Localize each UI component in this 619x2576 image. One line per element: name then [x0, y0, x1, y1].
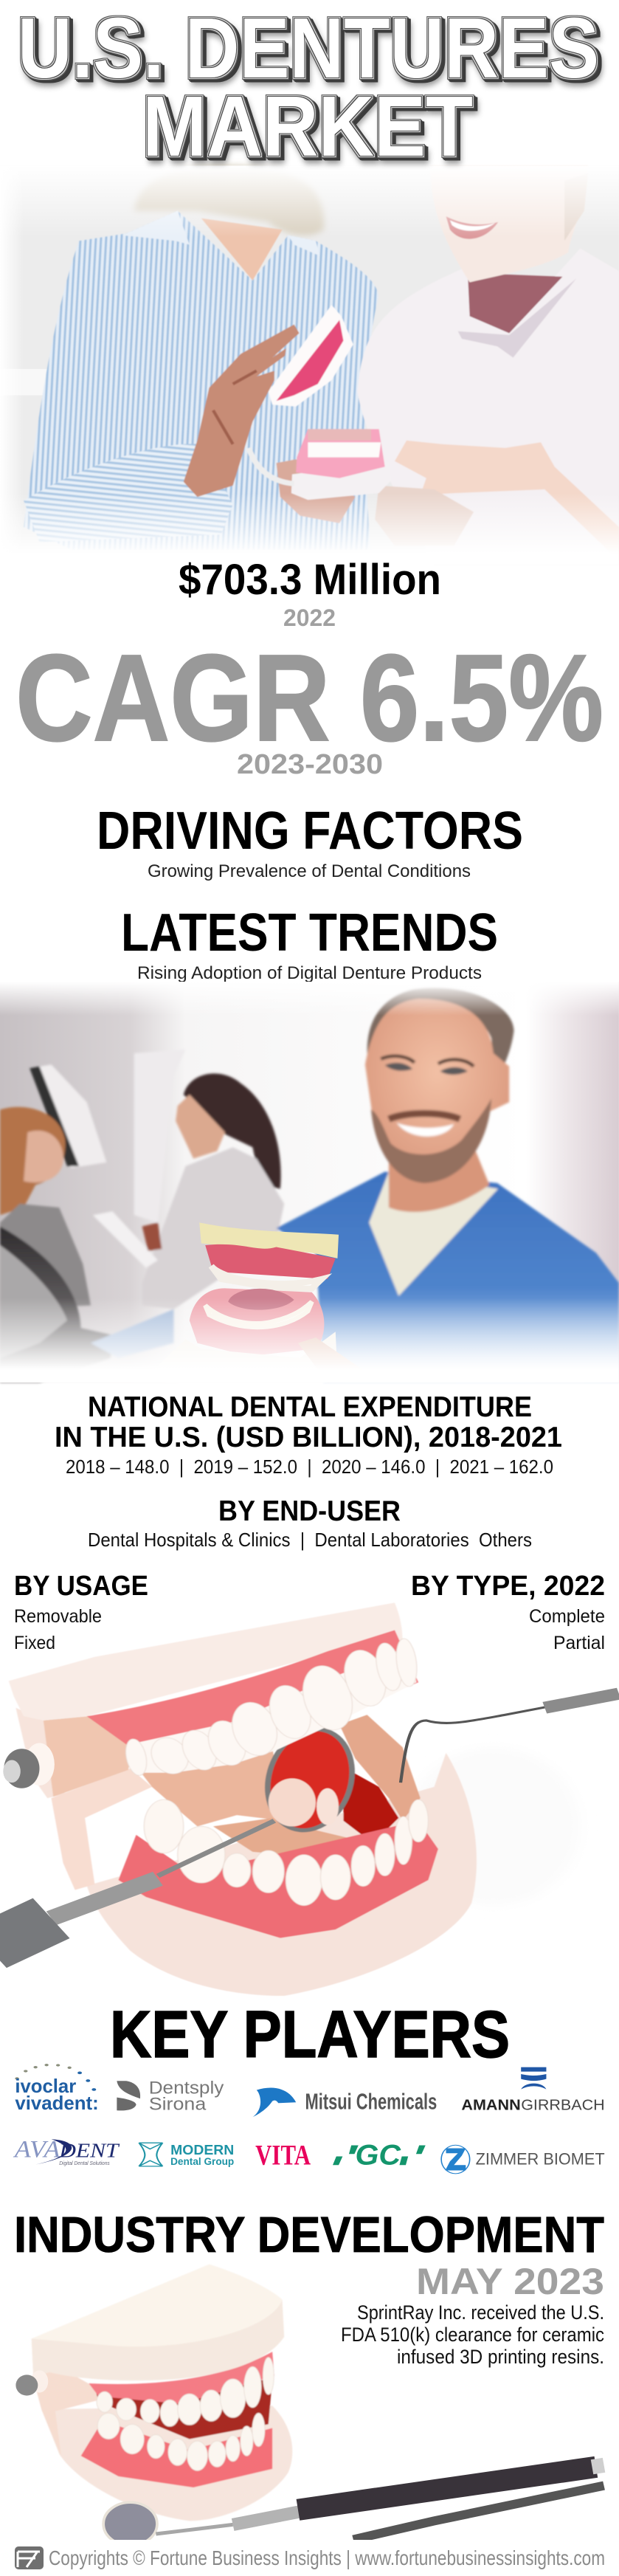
logo: Mitsui Chemicals — [252, 2088, 437, 2117]
dental probe — [353, 2486, 604, 2540]
title: MARKET — [142, 78, 473, 174]
heading: latest trends: LATEST TRENDS — [121, 903, 498, 962]
title — [18, 0, 599, 174]
photo: open denture model with mirror and probe — [0, 1602, 619, 1996]
denture model — [158, 1222, 379, 1382]
logo: Amann Girrbach: AMANN — [461, 2096, 521, 2113]
smile — [397, 1123, 454, 1137]
heading: by end-user: BY END-USER — [218, 1495, 401, 1527]
logo: GC: GC — [356, 2138, 401, 2171]
neck of patient — [201, 218, 283, 280]
logo: Dentsply Sirona — [117, 2078, 224, 2113]
beard — [371, 1098, 491, 1183]
right hand — [395, 441, 619, 561]
lower gums — [81, 2420, 272, 2487]
end-user list: Dental Hospitals & Clinics | Dental Laboratories Others — [88, 1529, 532, 1551]
company logos — [13, 2064, 605, 2174]
logo: ivoclar vivadent: vivadent: — [15, 2093, 99, 2114]
right woman coat — [357, 249, 619, 565]
logo: ivoclar vivadent — [15, 2064, 99, 2114]
assistant — [184, 1073, 281, 1188]
equipment arm — [134, 1050, 185, 1222]
logo: AvaDent: Digital Dental Solutions — [59, 2160, 110, 2166]
wire — [249, 448, 294, 483]
mouth back wall — [131, 1747, 284, 1826]
logo: ivoclar vivadent: ivoclar — [15, 2076, 76, 2097]
face — [430, 165, 588, 282]
development text — [341, 2301, 604, 2368]
heading: driving factors: DRIVING FACTORS — [97, 802, 523, 861]
undershirt — [468, 273, 562, 333]
forecast period: 2023-2030 — [237, 749, 383, 780]
hinge pin — [15, 2370, 48, 2396]
logo: Amann Girrbach — [461, 2067, 605, 2113]
mirror handle — [0, 1821, 274, 1948]
upper teeth band — [128, 1646, 416, 1773]
scrubs — [276, 1172, 619, 1382]
type item: complete: Complete — [529, 1606, 605, 1627]
photo: closed denture model with dental tools — [15, 2265, 604, 2546]
logo: AvaDent: AVA — [13, 2135, 60, 2163]
driving factor text: Growing Prevalence of Dental Conditions — [148, 861, 471, 881]
mouth dark red — [343, 1767, 398, 1843]
value year: 2022 — [283, 605, 336, 631]
lower teeth — [144, 1800, 428, 1906]
lower base — [87, 1753, 477, 1996]
company logos: VITA — [255, 2139, 311, 2171]
teeth — [97, 2358, 274, 2470]
date: MAY 2023 — [416, 2261, 604, 2302]
dental chair — [0, 1227, 114, 1382]
logo: Zimmer Biomet — [441, 2145, 605, 2174]
face — [365, 999, 509, 1183]
probe — [401, 1694, 619, 1783]
hair — [367, 988, 514, 1085]
hinge column and lower block — [15, 1708, 65, 1798]
type item: partial: Partial — [553, 1633, 605, 1653]
back right teeth — [339, 1715, 421, 1821]
striped shirt — [24, 211, 378, 550]
logo: Modern Dental Group: Dental Group — [170, 2155, 234, 2167]
upper gums — [87, 1630, 418, 1753]
expenditure heading: NATIONAL DENTAL EXPENDITURE — [88, 1391, 532, 1423]
lower denture model — [291, 461, 392, 500]
photo: dentist holding denture model — [0, 982, 619, 1382]
heading: key players: KEY PLAYERS — [110, 1998, 510, 2072]
trend text: Rising Adoption of Digital Denture Products — [137, 963, 482, 983]
expenditure values: 2018 – 148.0 | 2019 – 152.0 | 2020 – 146.0 | 2021 – 162.0 — [66, 1456, 553, 1478]
hinge block — [32, 2339, 99, 2456]
upper base — [32, 2265, 284, 2380]
market value: $703.3 Million — [179, 556, 441, 604]
usage item: fixed: Fixed — [14, 1633, 55, 1653]
hinge pin — [3, 1743, 55, 1788]
logo: AvaDent — [13, 2135, 120, 2166]
left hand and wrist — [184, 325, 300, 497]
neck — [389, 1151, 489, 1212]
heading: by usage: BY USAGE — [14, 1571, 148, 1602]
mouth — [94, 2380, 272, 2439]
footer logo icon — [15, 2546, 44, 2569]
lower base — [41, 2405, 292, 2521]
holding hand under model — [276, 459, 355, 523]
eyes — [385, 1063, 468, 1075]
interior of hinge — [44, 1716, 132, 1797]
logo: Dentsply Sirona: Dentsply — [149, 2078, 224, 2098]
logo: Modern Dental Group — [139, 2143, 234, 2167]
lower gums — [118, 1821, 438, 1938]
logo: AvaDent: DENT — [58, 2140, 120, 2162]
crop below instrument area — [0, 2540, 619, 2576]
photo: patient and dentist holding denture model — [0, 165, 619, 565]
mirror reflection — [259, 1725, 361, 1834]
expenditure heading — [55, 1391, 562, 1453]
logo: Dentsply Sirona: Sirona — [149, 2094, 206, 2113]
left patient — [0, 1107, 66, 1215]
upper teeth — [122, 1638, 419, 1777]
upper gums — [89, 2352, 274, 2404]
usage item: removable: Removable — [14, 1606, 102, 1627]
dental mirror — [103, 2465, 604, 2546]
upper denture model — [269, 305, 353, 407]
upper base — [9, 1602, 403, 1721]
hair of patient — [134, 165, 324, 235]
expenditure heading: IN THE U.S. (USD BILLION), 2018-2021 — [55, 1422, 562, 1453]
company logos: Mitsui Chemicals — [305, 2089, 437, 2114]
undershirt — [369, 1172, 498, 1296]
heading: by type: BY TYPE, 2022 — [411, 1571, 605, 1602]
logo: Modern Dental Group: MODERN — [170, 2143, 234, 2158]
